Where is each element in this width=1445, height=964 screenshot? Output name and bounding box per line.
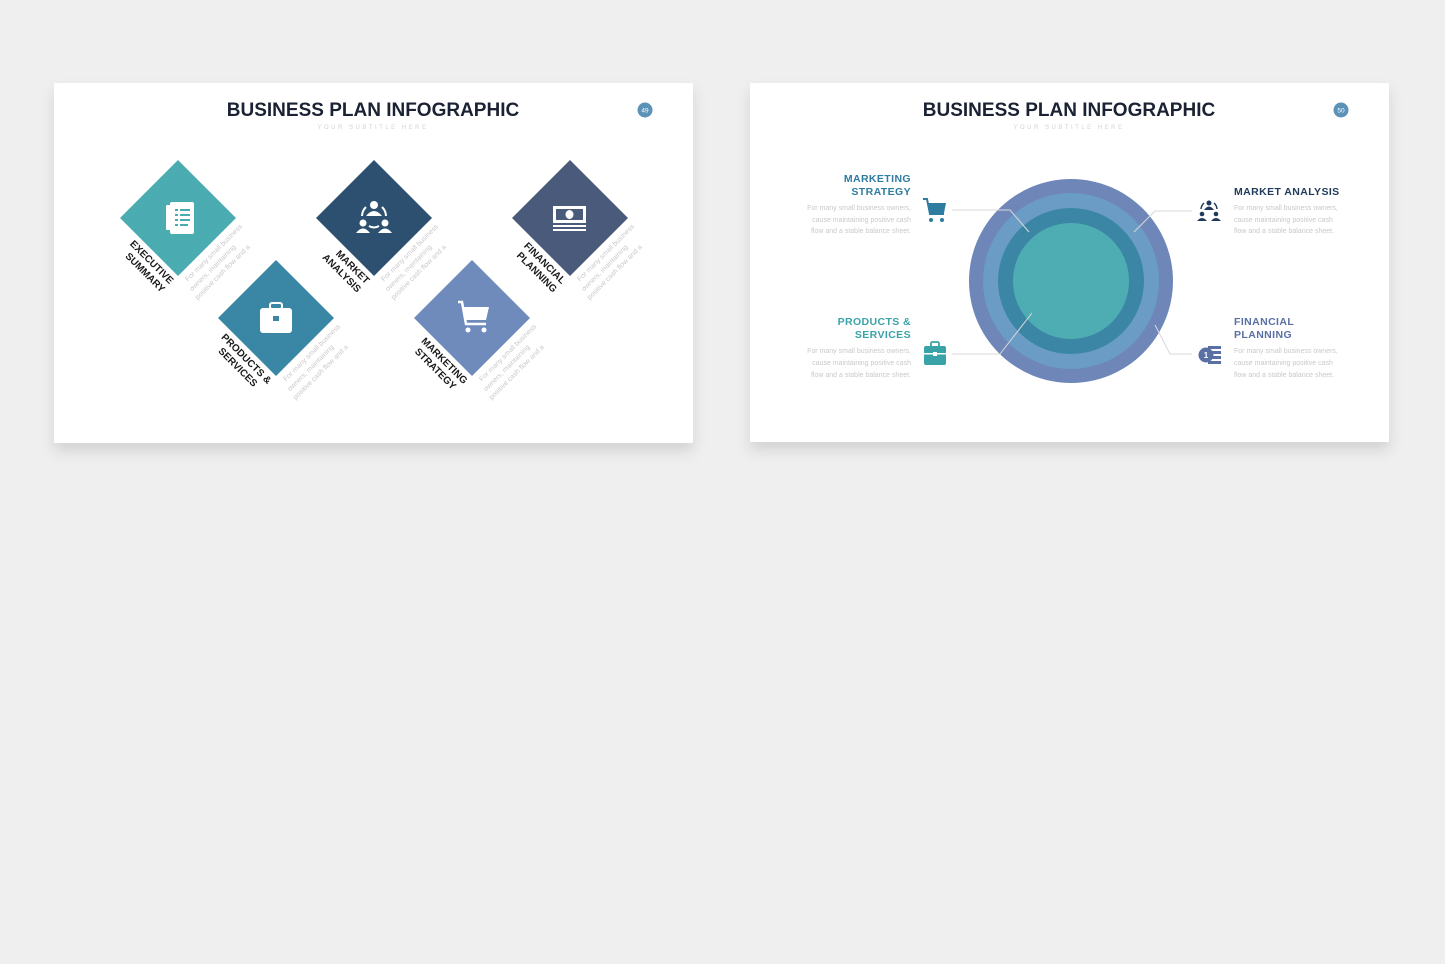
diamond: marketing strategy: positive cash flow and a: [488, 344, 546, 401]
block: products & services: flow and a stable balance sheet.: [811, 372, 911, 379]
diamond: market analysis: For many small business: [380, 223, 440, 283]
block: market analysis: For many small business owners,: [1234, 205, 1338, 212]
subtitle 1: YOUR SUBTITLE HERE: [317, 125, 429, 131]
block: products & services: PRODUCTS &: [838, 316, 911, 328]
diamond: financial planning: [512, 160, 651, 301]
diamond: products & services: [210, 260, 357, 401]
diamond: marketing strategy: [410, 260, 553, 401]
slide 1: diamond layout: [54, 83, 693, 443]
diamond: executive summary: owners, maintaining: [189, 244, 238, 293]
block: marketing strategy: For many small business owners,: [807, 205, 911, 212]
diamond: marketing strategy: STRATEGY: [412, 347, 458, 392]
diamond: market analysis: owners, maintaining: [385, 244, 434, 293]
icon: team navy: [1197, 200, 1221, 221]
icon: cart teal: [923, 199, 946, 222]
diamond: products & services: For many small business: [282, 323, 342, 383]
block: financial planning: For many small business owners,: [1234, 348, 1338, 355]
diamond: marketing strategy: owners, maintaining: [483, 344, 532, 393]
block: products & services: [807, 316, 911, 379]
icon: cart: [458, 302, 489, 332]
icon: briefcase teal: [924, 342, 946, 365]
title 1: BUSINESS PLAN INFOGRAPHIC: [227, 100, 519, 121]
block: financial planning: flow and a stable balance sheet.: [1234, 372, 1334, 379]
block: financial planning: cause maintaining positive cash: [1234, 360, 1333, 367]
diamond: market analysis: MARKET: [333, 249, 371, 287]
diamond: products & services: owners, maintaining: [287, 344, 336, 393]
diamond: financial planning: FINANCIAL: [521, 241, 567, 287]
icon: coins: [1198, 346, 1221, 364]
diamond: market analysis: [316, 160, 455, 301]
block: products & services: cause maintaining positive cash: [812, 360, 911, 367]
block: marketing strategy: [807, 173, 911, 235]
diamond: products & services: positive cash flow and a: [292, 344, 350, 401]
connector lines: [952, 210, 1192, 354]
concentric circle chart: [969, 179, 1173, 383]
diamond: executive summary: EXECUTIVE: [127, 239, 175, 287]
diamond: products & services: PRODUCTS &: [219, 332, 273, 387]
diamond: market analysis: ANALYSIS: [320, 252, 363, 295]
page number 49: 49: [641, 108, 649, 114]
title 2: BUSINESS PLAN INFOGRAPHIC: [923, 100, 1215, 121]
block: marketing strategy: STRATEGY: [851, 186, 911, 198]
block: marketing strategy: cause maintaining positive cash: [812, 217, 911, 224]
diamond: marketing strategy: For many small business: [478, 323, 538, 383]
slide 2: circle layout: [750, 83, 1389, 442]
page number 49: [638, 102, 652, 118]
diamond: financial planning: positive cash flow and a: [586, 244, 644, 301]
page number 50: 50: [1337, 108, 1345, 114]
diamond: financial planning: PLANNING: [514, 250, 559, 295]
block: products & services: SERVICES: [855, 329, 911, 341]
block: financial planning: PLANNING: [1234, 329, 1292, 341]
block: financial planning: FINANCIAL: [1234, 316, 1294, 328]
icon: document: [166, 202, 194, 234]
diamond: products & services: SERVICES: [216, 346, 259, 390]
icon: team: [356, 201, 392, 233]
block: financial planning: [1234, 316, 1338, 379]
block: market analysis: flow and a stable balance sheet.: [1234, 228, 1334, 235]
block: market analysis: cause maintaining positive cash: [1234, 217, 1333, 224]
diamond: financial planning: For many small business: [576, 223, 636, 283]
diamond: financial planning: owners, maintaining: [581, 244, 630, 293]
diamond: executive summary: SUMMARY: [123, 251, 167, 295]
icon: coins: 1: [1204, 351, 1209, 360]
diamond: executive summary: positive cash flow and a: [194, 244, 252, 301]
subtitle 2: YOUR SUBTITLE HERE: [1013, 125, 1125, 131]
block: products & services: For many small business owners,: [807, 348, 911, 355]
block: marketing strategy: MARKETING: [844, 173, 911, 185]
block: market analysis: MARKET ANALYSIS: [1234, 186, 1340, 198]
icon: briefcase: [260, 303, 292, 333]
icon: money: [553, 206, 586, 231]
diamond: executive summary: [119, 160, 259, 301]
diamond: marketing strategy: MARKETING: [419, 336, 469, 387]
block: market analysis: [1234, 186, 1340, 235]
diamond: executive summary: For many small business: [184, 223, 244, 283]
diamond: market analysis: positive cash flow and a: [390, 244, 448, 301]
page number 50: [1334, 102, 1348, 118]
block: marketing strategy: flow and a stable balance sheet.: [811, 228, 911, 235]
